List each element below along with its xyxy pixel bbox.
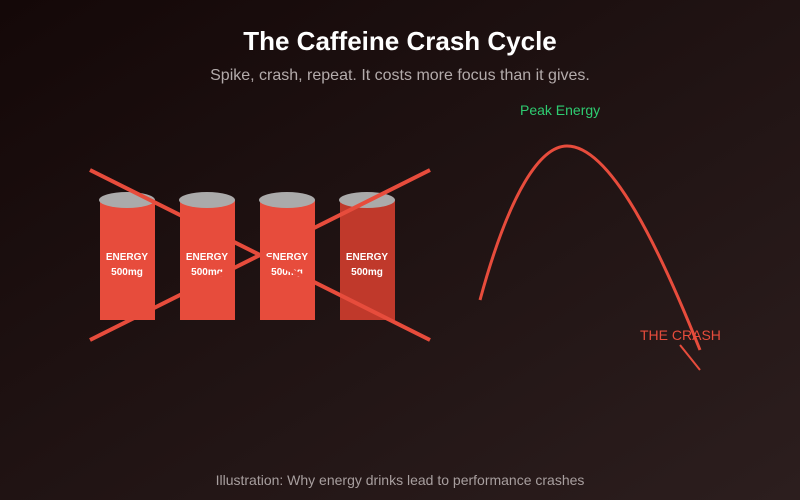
caption: Illustration: Why energy drinks lead to performance crashes bbox=[216, 472, 584, 488]
can 1: 500mg bbox=[111, 267, 143, 278]
label: peak energy: Peak Energy bbox=[520, 102, 600, 118]
can 3: ENERGY bbox=[266, 252, 308, 263]
can 4: 500mg bbox=[351, 267, 383, 278]
label: the crash: THE CRASH bbox=[640, 327, 721, 343]
can 1 bbox=[99, 192, 155, 320]
can 2: ENERGY bbox=[186, 252, 228, 263]
cross-out X over cans bbox=[90, 170, 430, 340]
can 4: ENERGY bbox=[346, 252, 388, 263]
can 4 bbox=[339, 192, 395, 320]
title: The Caffeine Crash Cycle bbox=[243, 26, 557, 56]
can 1: ENERGY bbox=[106, 252, 148, 263]
crash pointer line bbox=[680, 345, 700, 370]
can 3 bbox=[259, 192, 315, 320]
energy curve bbox=[480, 146, 700, 350]
can 2 bbox=[179, 192, 235, 320]
can 2: 500mg bbox=[191, 267, 223, 278]
subtitle: Spike, crash, repeat. It costs more focus than it gives. bbox=[210, 67, 590, 84]
energy drink cans bbox=[99, 192, 395, 320]
can 3: 500mg bbox=[271, 267, 303, 278]
